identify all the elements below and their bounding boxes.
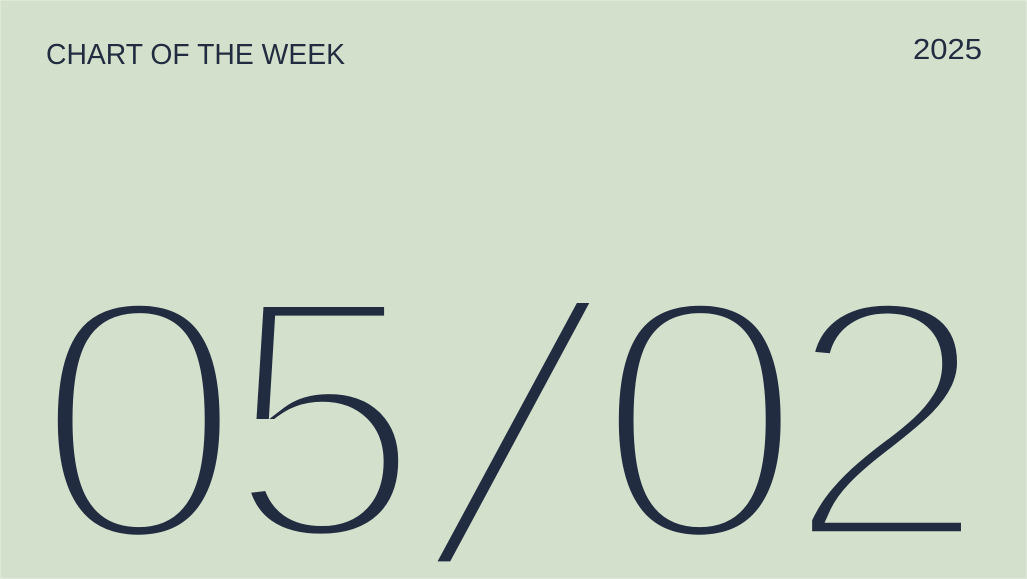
large date 05/02 — [34, 223, 989, 579]
year: 2025 — [913, 34, 982, 66]
title: CHART OF THE WEEK — [46, 39, 345, 71]
